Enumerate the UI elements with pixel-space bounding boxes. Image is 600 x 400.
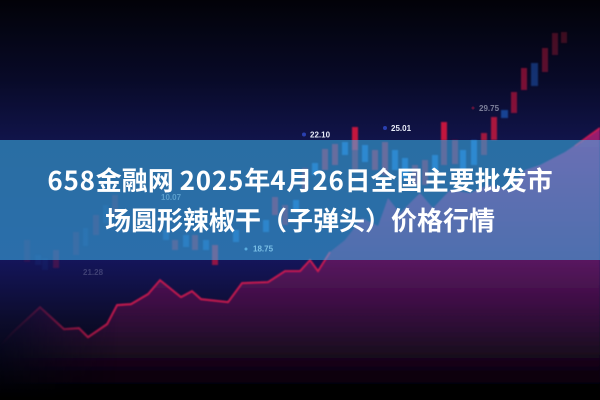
label: 10.07: 10.07 [161, 193, 182, 202]
label: 29.75: 29.75 [479, 104, 500, 113]
label: 25.01: 25.01 [391, 124, 412, 133]
label: 22.10: 22.10 [310, 130, 331, 140]
area chart [0, 128, 600, 400]
label: 18.75 [244, 244, 274, 254]
label: 21.28: 21.28 [83, 268, 104, 277]
title: 658金融网 2025年4月26日全国主要批发市 [47, 161, 553, 198]
title: 场圆形辣椒干（子弹头）价格行情 [105, 201, 495, 238]
title [47, 161, 553, 238]
price labels [83, 104, 500, 277]
banner [0, 140, 600, 260]
candlestick chart [24, 32, 567, 270]
label: 18.75: 18.75 [253, 244, 274, 254]
